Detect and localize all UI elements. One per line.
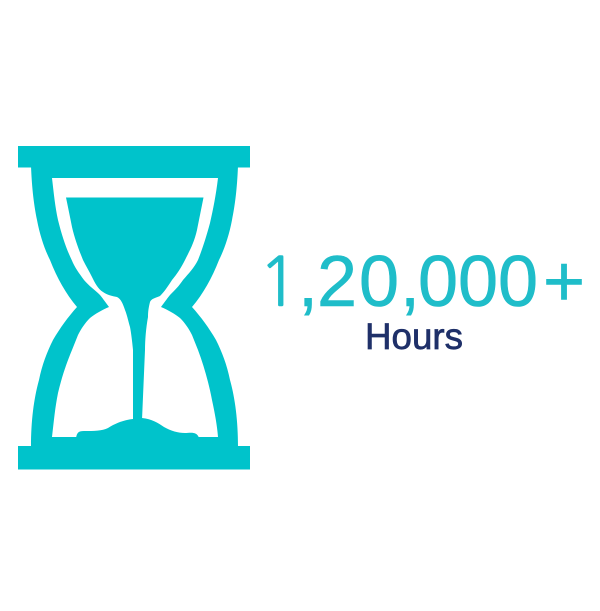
hourglass glass interior xyxy=(52,178,218,437)
statistic number: 1 xyxy=(258,248,299,316)
statistic number: ,20,000+ xyxy=(298,242,585,322)
hourglass outer frame xyxy=(31,166,238,447)
hourglass top bar xyxy=(18,146,250,168)
sand mound xyxy=(76,418,199,438)
sand in upper bulb and falling stream xyxy=(66,198,204,420)
hourglass bottom bar xyxy=(18,446,250,470)
icon: hourglass xyxy=(18,146,250,470)
statistic label: Hours xyxy=(365,316,463,357)
